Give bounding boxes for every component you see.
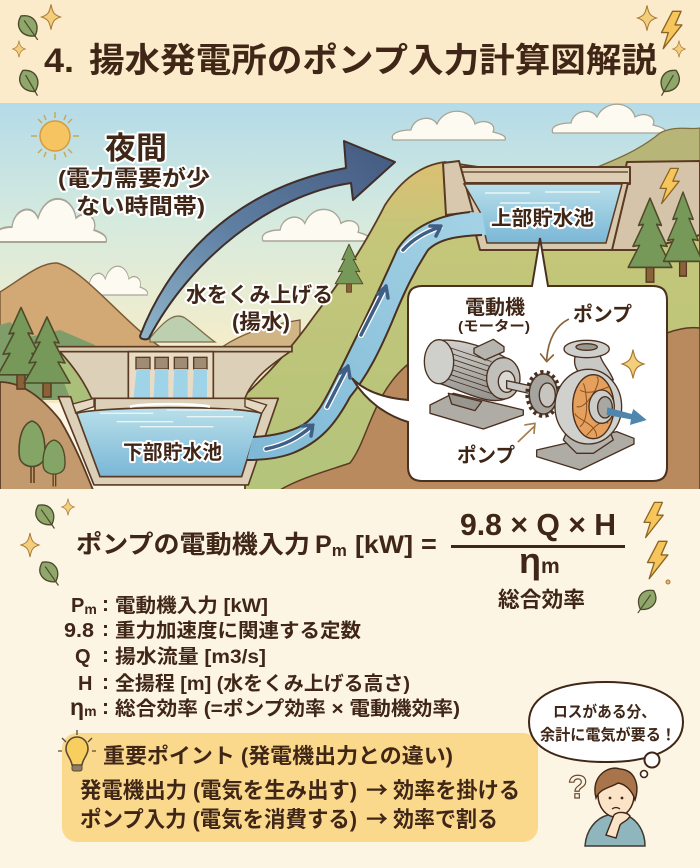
bubble text: ロスがある分、: [553, 702, 656, 721]
left dam wall: [443, 161, 473, 215]
upper reservoir: [443, 161, 700, 250]
sky: [0, 103, 700, 403]
right dam wall: [607, 161, 700, 250]
face: [609, 797, 611, 799]
label: motor sub: (モーター): [458, 318, 530, 334]
variable definitions: [64, 593, 460, 720]
callout arrows: [541, 319, 568, 362]
hand: [606, 812, 630, 838]
variable definitions: 揚水流量 [m3/s]: [115, 646, 266, 668]
basin rim: [462, 183, 628, 250]
label: lower reservoir: 下部貯水池: [123, 441, 222, 464]
key point line 1: →: [366, 773, 388, 805]
variable definitions: m: [84, 703, 97, 719]
formula left side: ポンプの電動機入力: [76, 531, 310, 559]
formula: P: [315, 531, 332, 559]
hair: [595, 768, 637, 800]
icon: sun: [31, 112, 79, 160]
question mark: ?: [568, 769, 588, 805]
trees on right: [628, 192, 700, 282]
dam wall: [60, 352, 290, 398]
back wall: [455, 167, 630, 184]
variable definitions: 総合効率 (=ポンプ効率 × 電動機効率): [115, 698, 460, 720]
label: off-peak line 2: ない時間帯): [76, 194, 205, 219]
motor body: [439, 340, 507, 401]
variable definitions: :: [102, 593, 109, 616]
label: night: 夜間: [105, 131, 167, 166]
title decorations: [13, 4, 685, 100]
pump base: [537, 432, 634, 470]
variable definitions: H: [78, 673, 92, 695]
blue outflow arrow: [607, 407, 647, 425]
variable definitions: 電動機入力 [kW]: [115, 595, 268, 617]
variable definitions: Q: [75, 646, 91, 668]
flow arrows: [266, 227, 440, 449]
lower water: [77, 408, 262, 477]
shaft: [507, 381, 532, 394]
variable definitions: m: [84, 601, 97, 617]
formula decorations: [21, 499, 670, 618]
formula: [kW]: [355, 531, 413, 559]
concrete basin: [58, 397, 278, 485]
motor front cap: [487, 358, 520, 399]
head: [598, 773, 634, 817]
variable definitions: 重力加速度に関連する定数: [115, 620, 362, 642]
formula: [76, 507, 625, 612]
brown foreground ground: [280, 328, 700, 490]
far mountains: [0, 128, 700, 400]
variable definitions: :: [102, 618, 109, 641]
formula: m: [332, 541, 347, 560]
clouds: [0, 104, 665, 295]
key point line 2: ポンプ入力 (電気を消費する): [80, 807, 357, 832]
sparkle: [622, 350, 644, 378]
variable definitions: 全揚程 [m] (水をくみ上げる高さ): [115, 672, 410, 695]
left brown hill: [0, 382, 93, 490]
variable definitions: η: [70, 694, 84, 720]
label: pumping: (揚水): [232, 311, 290, 334]
pump neck and flange: [575, 355, 613, 380]
coupling gear: [528, 373, 559, 415]
spillway: [128, 352, 213, 407]
variable definitions: :: [102, 644, 109, 667]
hub: [589, 390, 614, 423]
callout panel: motor and pump: [352, 238, 667, 481]
title: 4.: [44, 42, 74, 80]
label: pumping up: 水をくみ上げる: [186, 284, 333, 307]
title banner: [0, 0, 700, 103]
label: upper reservoir: 上部貯水池: [491, 207, 594, 230]
label: motor: 電動機: [465, 296, 525, 319]
pump casing: [555, 369, 622, 444]
key point line 1: 効率を掛ける: [393, 778, 520, 803]
icon: light bulb: [58, 730, 96, 771]
fraction numerator: 9.8 × Q × H: [460, 507, 616, 542]
key point heading: 重要ポイント (発電機出力との違い): [103, 745, 453, 768]
variable definitions: :: [102, 696, 109, 719]
fraction denominator: ηm: [519, 540, 560, 581]
impeller: [573, 375, 614, 439]
lower dam and reservoir: [50, 347, 292, 485]
variable definitions: P: [71, 595, 84, 617]
upper water: [464, 184, 622, 243]
curved night arrow: [140, 141, 395, 339]
small background tree: [335, 244, 363, 292]
icon: lightning on wall: [660, 168, 679, 204]
left green: [50, 347, 100, 407]
speech bubble: 余計に電気が要る！: [540, 725, 676, 744]
terminal box: [474, 339, 504, 360]
character: thinking person: [568, 768, 645, 846]
penstock pipe: [247, 212, 486, 460]
motor base: [430, 393, 523, 429]
speech bubble: [529, 682, 683, 778]
label: pump lower: ポンプ: [457, 444, 515, 467]
key point line 2: 効率で割る: [393, 807, 498, 832]
label: pump upper: ポンプ: [573, 303, 632, 326]
green hillside: [245, 162, 700, 490]
key point line 2: →: [366, 802, 388, 834]
denominator caption: 総合効率: [498, 588, 585, 612]
formula: =: [421, 529, 437, 559]
edge between scene and lower section: [0, 489, 700, 493]
variable definitions: :: [102, 671, 109, 694]
body: [585, 815, 645, 846]
panel: key point: [58, 730, 538, 842]
key point line 1: 発電機出力 (電気を生み出す): [80, 778, 357, 803]
left trees: [0, 307, 70, 486]
pipe edges: [253, 212, 470, 437]
title: 揚水発電所のポンプ入力計算図解説: [89, 42, 657, 80]
variable definitions: 9.8: [64, 620, 94, 642]
label: off-peak line 1: (電力需要が少: [58, 166, 210, 191]
illustration: pumped storage scene: [0, 103, 700, 490]
